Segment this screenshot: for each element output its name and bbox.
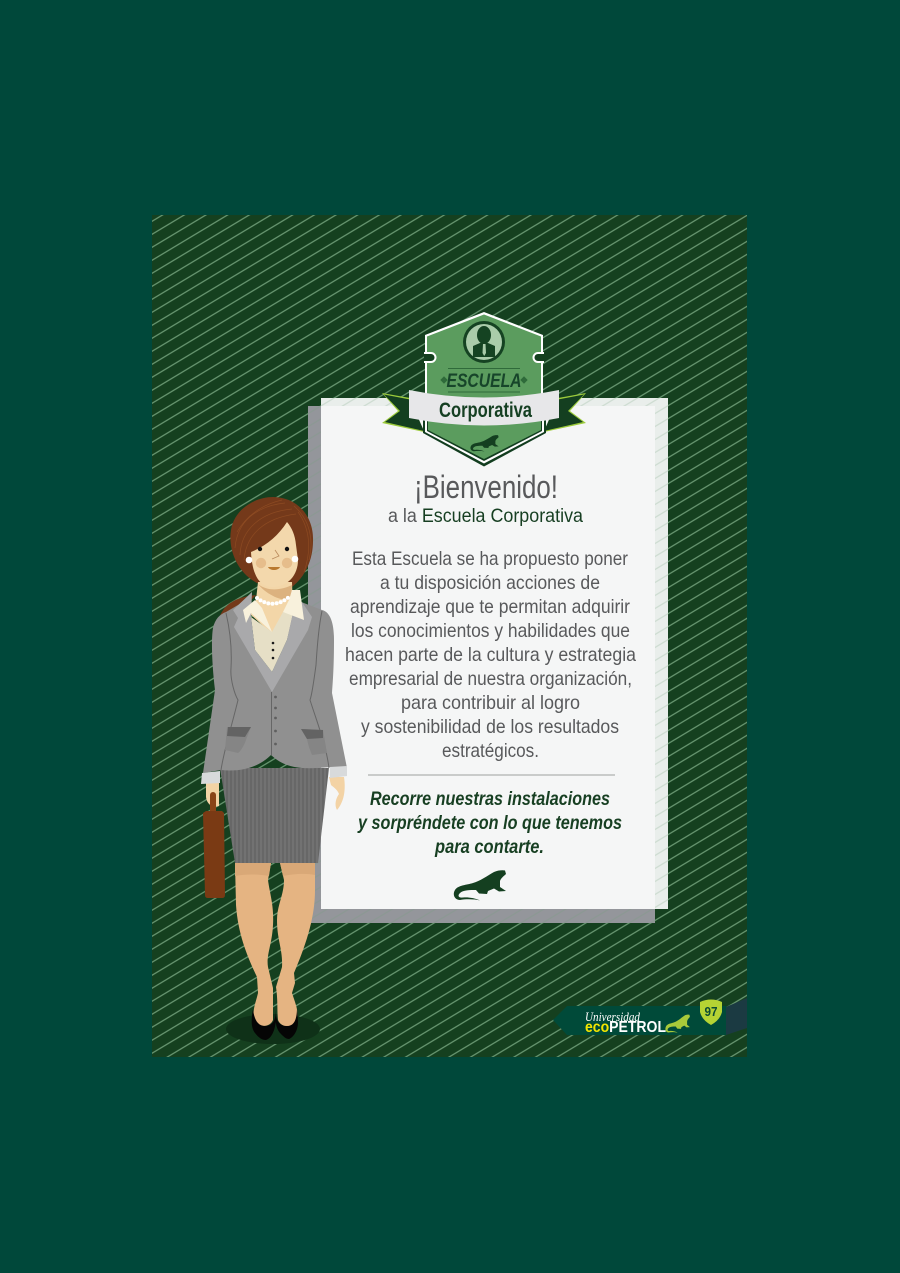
body text: y sostenibilidad de los resultados	[361, 716, 619, 738]
hair	[230, 497, 313, 587]
logo iguana	[665, 1015, 690, 1033]
icon: badge iguana	[470, 435, 499, 451]
face	[246, 522, 298, 587]
divider	[368, 774, 615, 776]
pockets	[225, 727, 327, 755]
call to action: para contarte.	[434, 836, 544, 858]
subheading: a la Escuela Corporativa	[388, 506, 583, 527]
body text: los conocimientos y habilidades que	[351, 620, 630, 642]
heading: Bienvenido: ¡Bienvenido!	[414, 469, 558, 505]
body text: empresarial de nuestra organización,	[349, 668, 632, 690]
shield notches	[424, 353, 544, 362]
badge word: ESCUELA: ESCUELA	[446, 371, 522, 392]
shield	[423, 312, 546, 466]
logo wordmark: ecoPETROL	[585, 1019, 666, 1036]
icon: iguana	[454, 870, 506, 900]
left hand	[206, 783, 219, 807]
hair strands	[235, 500, 311, 572]
illustration: businesswoman	[201, 497, 347, 1044]
jacket buttons	[274, 696, 277, 745]
panel: welcome card	[308, 398, 668, 923]
body text: para contribuir al logro	[401, 692, 580, 714]
badge rules and diamonds	[441, 368, 527, 392]
icon: business person	[463, 321, 505, 363]
right hand	[329, 777, 345, 810]
body text: a tu disposición acciones de	[380, 572, 600, 594]
badge: Escuela Corporativa	[382, 312, 586, 466]
shoes	[252, 1007, 298, 1040]
ribbon	[409, 390, 559, 426]
body text	[345, 548, 636, 762]
ribbon word: Corporativa: Corporativa	[439, 399, 532, 422]
striped dark green panel	[152, 215, 747, 1057]
page number shield	[700, 1000, 722, 1025]
skirt	[220, 768, 329, 863]
cuffs	[201, 766, 347, 784]
blouse buttons	[272, 642, 274, 659]
body text: hacen parte de la cultura y estrategia	[345, 644, 636, 666]
call to action: Recorre nuestras instalaciones	[370, 788, 610, 810]
necklace	[257, 597, 289, 604]
call to action: y sorpréndete con lo que tenemos	[357, 812, 622, 834]
collar	[243, 590, 304, 632]
footer: Universidad Ecopetrol tag	[553, 998, 747, 1036]
ponytail	[219, 595, 256, 620]
ribbon tails	[382, 393, 586, 432]
legs	[235, 863, 315, 1026]
logo script: Universidad	[585, 1009, 640, 1024]
seams	[221, 611, 329, 770]
call to action	[357, 788, 622, 858]
neck	[250, 582, 293, 634]
blouse	[251, 612, 294, 672]
page number shield: 97	[704, 1004, 718, 1019]
body text: aprendizaje que te permitan adquirir	[350, 596, 630, 618]
body text: estratégicos.	[442, 740, 539, 762]
briefcase	[203, 792, 225, 898]
lapels	[233, 592, 312, 692]
body text: Esta Escuela se ha propuesto poner	[352, 548, 628, 570]
floor shadow	[226, 1014, 320, 1044]
jacket	[201, 592, 347, 784]
